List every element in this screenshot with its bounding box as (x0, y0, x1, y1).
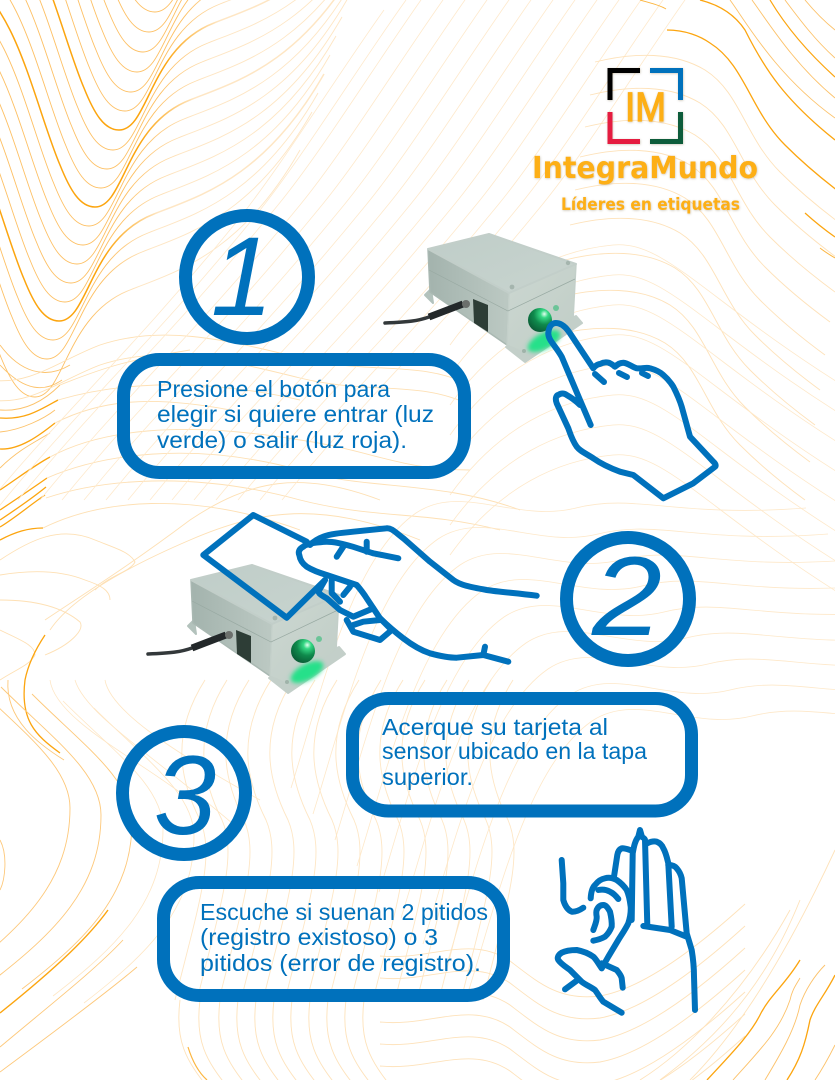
icon: hand pressing button (548, 323, 716, 498)
step 3 text panel (164, 882, 504, 996)
step 2 text panel (352, 698, 692, 811)
step 3 number badge: 3 (154, 733, 216, 858)
step 1 text panel (124, 360, 464, 472)
step 1 text panel: elegir si quiere entrar (luz (157, 401, 434, 427)
step 1 text panel: Presione el botón para (157, 376, 390, 402)
step 2 text panel: Acerque su tarjeta al (382, 714, 608, 740)
logo tagline: Líderes en etiquetas (561, 195, 740, 214)
device photo: step 2 (148, 565, 345, 693)
step 2 text panel: superior. (382, 764, 473, 790)
step 1 number badge: 1 (211, 214, 273, 339)
step 2 number badge (566, 534, 690, 660)
step 2 text panel: sensor ubicado en la tapa (382, 738, 647, 764)
icon: hand cupped behind ear (558, 830, 695, 1013)
step 1 text panel: verde) o salir (luz roja). (157, 427, 407, 453)
device photo: step 1 (385, 234, 582, 362)
logo name: IntegraMundo (532, 151, 758, 186)
logo icon: four coloured corner brackets with IM (610, 70, 680, 142)
step 2 number badge: 2 (591, 534, 662, 659)
icon: hand holding card (203, 515, 537, 662)
logo icon: four coloured corner brackets with IM: IM (625, 84, 666, 130)
step 3 text panel: pitidos (error de registro). (200, 950, 481, 976)
step 1 number badge (186, 214, 308, 339)
step 3 text panel: (registro existoso) o 3 (200, 924, 438, 950)
step 3 text panel: Escuche si suenan 2 pitidos (200, 899, 488, 925)
logo: IntegraMundo (532, 70, 758, 214)
step 3 number badge (122, 732, 246, 858)
